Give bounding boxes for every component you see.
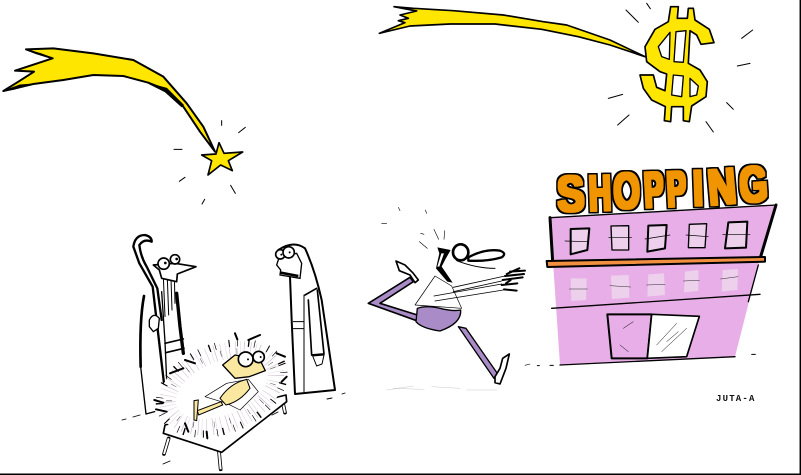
shepherd hand xyxy=(149,315,159,332)
upper window bars xyxy=(565,234,750,242)
door left xyxy=(607,314,652,358)
manger bed xyxy=(163,395,287,452)
motion ticks xyxy=(382,207,530,390)
baby cloth xyxy=(205,379,258,410)
baby body xyxy=(220,379,250,405)
door right xyxy=(647,314,699,358)
lower windows xyxy=(571,269,738,301)
building ground marks xyxy=(537,354,755,366)
shorts xyxy=(416,307,461,331)
star xyxy=(202,143,243,175)
back leg xyxy=(368,277,417,321)
lower window bars xyxy=(569,277,738,289)
baby legs xyxy=(197,402,223,415)
front shoe xyxy=(495,354,509,384)
star sparkles xyxy=(174,121,245,204)
baby head xyxy=(223,351,265,378)
hands xyxy=(502,268,525,291)
SHOPPING sign: N xyxy=(705,157,738,216)
dollar sign xyxy=(608,3,753,132)
manger legs xyxy=(164,402,285,469)
shepherd figure xyxy=(133,235,196,414)
ground marks xyxy=(122,393,345,464)
arms xyxy=(434,276,505,301)
SHOPPING sign: H xyxy=(588,164,612,221)
shepherd beard xyxy=(163,277,175,317)
manger with baby xyxy=(144,325,299,469)
shepherd head xyxy=(153,255,196,282)
SHOPPING sign: G xyxy=(738,157,769,214)
dollar sparkles xyxy=(608,3,753,132)
shepherd outlines xyxy=(140,292,184,414)
building outline xyxy=(550,205,776,365)
SHOPPING sign: I xyxy=(692,161,704,217)
upper windows xyxy=(571,222,747,254)
orange band xyxy=(547,257,765,267)
door glass marks xyxy=(620,322,687,352)
SHOPPING sign: O xyxy=(612,163,641,220)
building facade xyxy=(550,205,776,365)
signature: JUTA-A xyxy=(716,394,756,404)
comet tail heavy shading xyxy=(3,49,183,107)
comet tail xyxy=(3,48,215,152)
shooting star: nativity comet xyxy=(3,48,245,204)
Mary hand xyxy=(313,355,324,366)
SHOPPING sign: S xyxy=(556,165,586,223)
head xyxy=(453,244,504,268)
shopping building xyxy=(537,157,776,366)
running shopper xyxy=(368,207,530,390)
Mary figure xyxy=(276,245,335,394)
shooting dollar: shopping comet xyxy=(379,3,753,132)
straw dark tufts xyxy=(154,333,287,438)
shirt xyxy=(415,276,462,308)
shepherd robe xyxy=(140,278,185,414)
Mary robe details xyxy=(293,288,324,392)
hair xyxy=(436,247,453,283)
shepherd crook xyxy=(133,235,164,383)
SHOPPING sign: P xyxy=(665,160,688,218)
straw xyxy=(144,325,299,452)
baby feet xyxy=(194,400,198,421)
dollar comet tail xyxy=(379,7,645,57)
Mary veil and robe xyxy=(278,245,335,394)
back shoe xyxy=(396,261,418,283)
Mary head xyxy=(276,247,302,278)
front leg xyxy=(458,327,497,378)
SHOPPING sign: P xyxy=(643,161,665,218)
SHOPPING sign xyxy=(556,157,769,223)
